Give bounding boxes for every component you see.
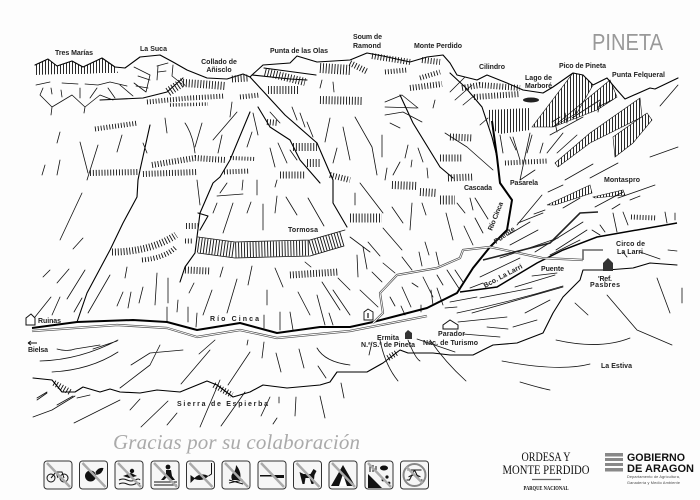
place labels: Monte Perdido — [414, 43, 462, 50]
icon: no dogs — [294, 461, 322, 489]
place labels: La Suca — [140, 46, 167, 53]
icon: no cycling — [44, 461, 72, 489]
icon: no hunting — [258, 461, 286, 489]
building: Ermita — [405, 330, 412, 339]
place labels: Tormosa — [288, 227, 318, 234]
place labels: La Larri — [617, 249, 643, 256]
building: Parador — [443, 320, 458, 329]
place labels: Marboré — [525, 83, 552, 90]
logo: Ordesa y Monte Perdido national park: ORDESA Y — [522, 449, 571, 464]
place labels: Punta de las Olas — [270, 48, 328, 55]
place labels: Sierra de Espierba — [177, 401, 268, 408]
map: Pineta valley relief drawing — [26, 53, 682, 427]
place labels: Ermita — [377, 335, 399, 342]
title: PINETA: PINETA — [592, 29, 664, 55]
icon: no aircraft — [400, 461, 428, 489]
place labels: Añisclo — [206, 67, 232, 74]
logo: Gobierno de Aragón: GOBIERNO — [627, 452, 685, 464]
logo: Gobierno de Aragón: Ganadería y Medio Ambiente — [627, 481, 680, 485]
place labels: Bielsa — [28, 347, 48, 354]
place labels: Puente — [493, 226, 517, 246]
road — [32, 212, 603, 338]
lower slope strokes, Sierra de Espierba — [33, 340, 550, 427]
slope strokes — [35, 63, 682, 367]
logo: Gobierno de Aragón — [605, 452, 694, 485]
place labels: Puente — [541, 266, 564, 273]
place labels: Tres Marías — [55, 50, 93, 57]
place labels: Pasarela — [510, 180, 538, 187]
place labels: Río Cinca — [210, 316, 259, 323]
logo: Ordesa y Monte Perdido national park — [502, 449, 590, 492]
icon: no rafting — [151, 461, 179, 489]
icon: no fires — [222, 461, 250, 489]
place labels: Pasbres — [590, 282, 620, 289]
Río Cinca river — [32, 121, 677, 333]
building: Refugio Pastores — [603, 258, 613, 271]
logo: Ordesa y Monte Perdido national park: PARQUE NACIONAL — [524, 486, 568, 492]
place labels: Nac. de Turismo — [423, 340, 478, 347]
place labels: Parador — [438, 331, 465, 338]
place labels: Montaspro — [604, 177, 640, 184]
building: information point — [364, 309, 373, 320]
place labels: 'Ref. — [598, 276, 612, 283]
place labels: N.ª S.ª de Pineta — [361, 342, 415, 349]
icon: no fishing — [186, 461, 214, 489]
place labels: Collado de — [201, 59, 237, 66]
thank-you message: Gracias por su colaboración — [113, 430, 360, 454]
icon: no swimming — [115, 461, 143, 489]
prohibition icons — [44, 461, 428, 489]
icon: no disturbing rocks and flora — [365, 461, 393, 489]
place labels: Río Cinca — [487, 201, 505, 232]
place labels: Punta Felqueral — [612, 72, 665, 79]
hatched cliff bands — [35, 56, 657, 275]
place labels: Soum de — [353, 34, 382, 41]
Sierra ridge line — [33, 263, 677, 397]
arrow to Bielsa — [28, 341, 37, 345]
place labels: Bco. La Larri — [483, 263, 524, 290]
logo: Gobierno de Aragón: Departamento de Agricultura, — [627, 475, 680, 479]
place labels: Cascada — [464, 185, 492, 192]
icon: no picking plants — [80, 461, 108, 489]
Lago de Marboré — [523, 98, 539, 102]
place labels — [28, 34, 665, 408]
place labels: Lago de — [525, 75, 552, 82]
place labels: Circo de — [616, 241, 645, 248]
icon: no camping — [329, 461, 357, 489]
place labels: Ramond — [353, 43, 381, 50]
mountain skyline ridge — [35, 53, 678, 322]
place labels: Ruinas — [38, 318, 61, 325]
place labels: Cilindro — [479, 64, 505, 71]
logo: Ordesa y Monte Perdido national park: MONTE PERDIDO — [502, 462, 590, 477]
place labels: Pico de Pineta — [559, 63, 606, 70]
place labels: La Estiva — [601, 363, 632, 370]
building: Ruinas — [26, 314, 35, 325]
logo: Gobierno de Aragón: DE ARAGON — [627, 463, 694, 475]
